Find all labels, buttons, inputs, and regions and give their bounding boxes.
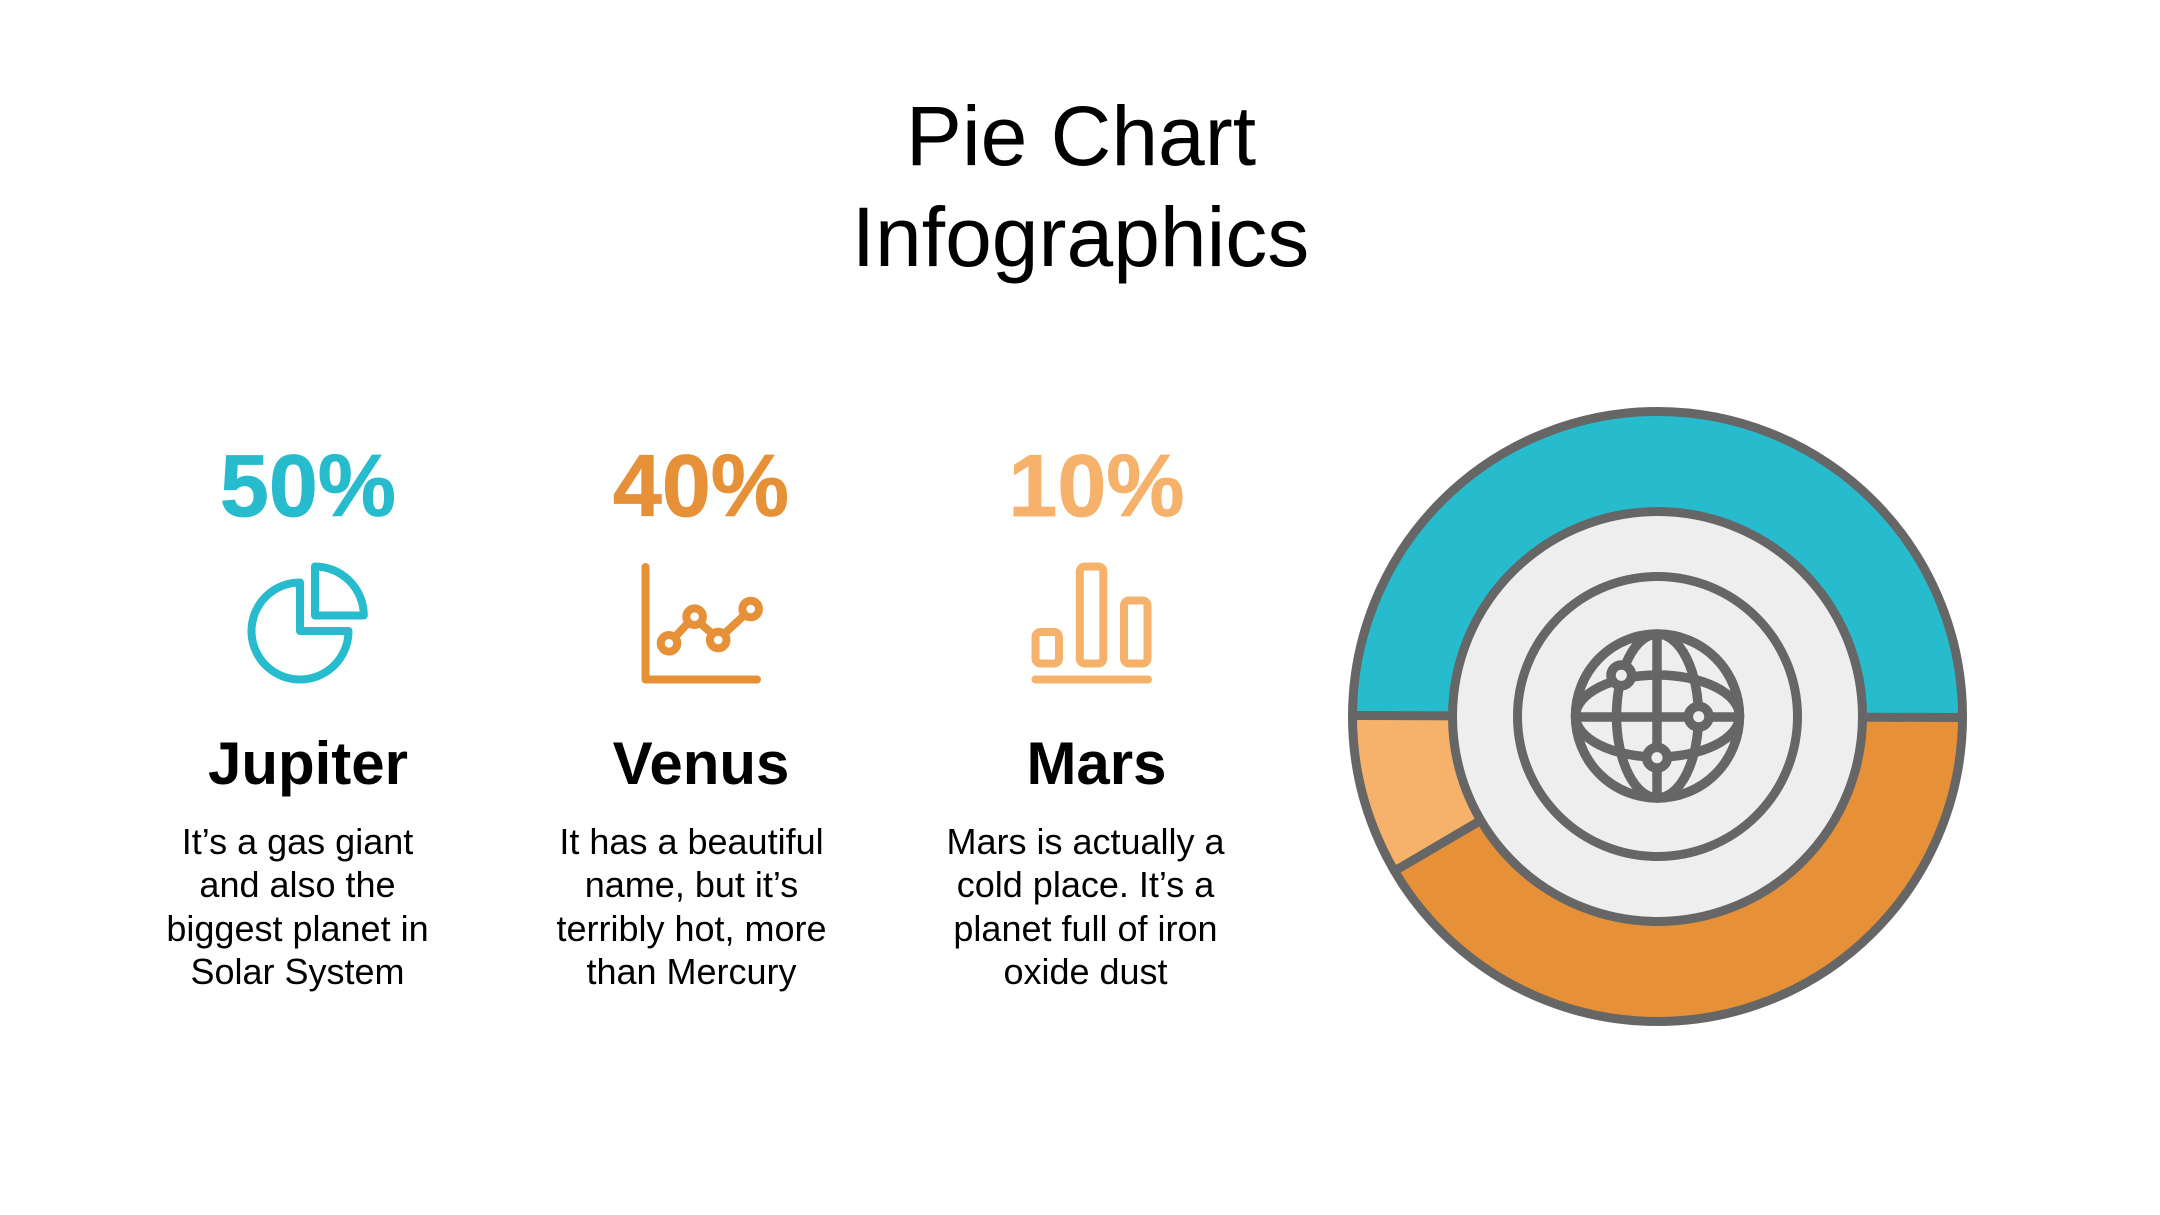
outer ring	[1352, 412, 1962, 1022]
Venus description: terribly hot, more	[556, 908, 827, 949]
title	[852, 89, 1309, 284]
Jupiter description: biggest planet in	[166, 908, 429, 949]
segment: Mars 10%	[1352, 716, 1658, 871]
Venus description: than Mercury	[586, 951, 797, 992]
Venus name: Venus	[613, 730, 789, 797]
icon: pie chart	[252, 566, 364, 680]
Mars name: Mars	[1026, 730, 1167, 797]
icon: line chart	[646, 567, 759, 680]
segment: Jupiter 50%	[1352, 411, 1963, 717]
Jupiter description	[166, 821, 429, 992]
Mars description: oxide dust	[1003, 951, 1168, 992]
donut chart	[1352, 411, 1963, 1022]
inner disc	[1452, 512, 1862, 922]
title: Pie Chart	[906, 89, 1256, 183]
Mars description: cold place. It’s a	[957, 864, 1215, 905]
Venus description: name, but it’s	[585, 864, 798, 905]
icon: bar chart	[1036, 566, 1148, 680]
Mars description	[946, 821, 1226, 992]
Jupiter name: Jupiter	[208, 730, 408, 797]
panel: Jupiter	[166, 436, 429, 992]
Venus description	[556, 821, 827, 992]
inner ring	[1518, 576, 1798, 856]
Mars description: planet full of iron	[953, 908, 1218, 949]
Venus description: It has a beautiful	[559, 821, 824, 862]
Mars description: Mars is actually a	[946, 821, 1226, 862]
panel: Mars	[946, 436, 1226, 992]
icon: globe	[1575, 634, 1740, 798]
Venus percentage: 40%	[613, 436, 789, 535]
Jupiter description: It’s a gas giant	[182, 821, 413, 862]
panel: Venus	[556, 436, 827, 992]
segment: Venus 40%	[1395, 716, 1962, 1021]
Jupiter description: Solar System	[190, 951, 405, 992]
title: Infographics	[852, 190, 1309, 284]
Mars percentage: 10%	[1008, 436, 1185, 535]
Jupiter description: and also the	[199, 864, 396, 905]
Jupiter percentage: 50%	[220, 436, 396, 535]
segment dividers	[1352, 716, 1962, 871]
